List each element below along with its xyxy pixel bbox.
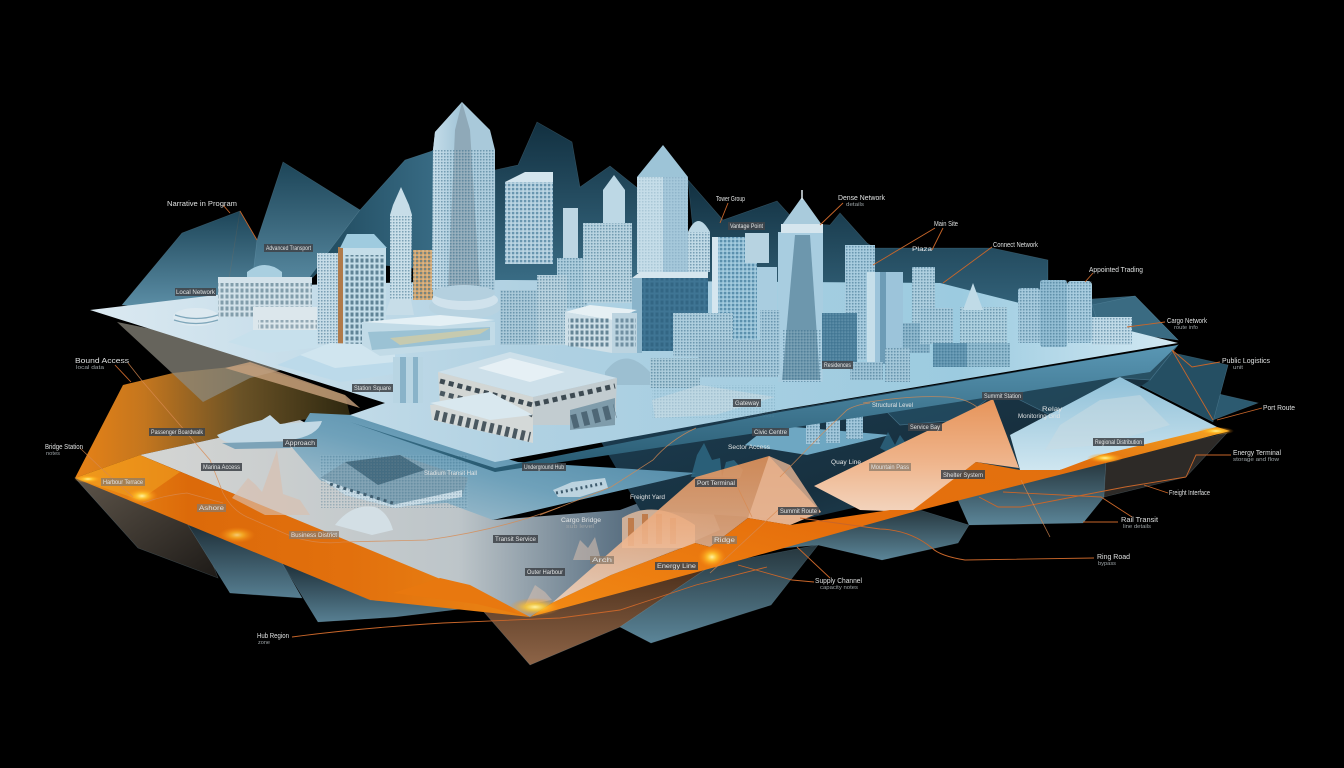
ghost skyline left (232, 450, 310, 515)
label: logistics (1222, 356, 1270, 371)
label: logistics: Public Logistics (1222, 356, 1270, 365)
facet strokes under plate (880, 345, 1178, 425)
chip: Plaza (912, 246, 932, 253)
chip: Freight Yard (630, 494, 665, 501)
mid block (253, 307, 333, 337)
chip: Underground Hub (524, 464, 564, 471)
outer labels (45, 193, 1295, 646)
label: port: Port Route (1263, 403, 1295, 412)
chip (590, 556, 614, 564)
lower peach facets and blue triangle (552, 377, 1217, 603)
label: supply: capacity notes (820, 585, 859, 591)
label: connect: Connect Network (993, 240, 1038, 249)
label: access: Bound Access (75, 356, 129, 365)
main tower (429, 102, 501, 319)
label: hub: Hub Region (257, 631, 289, 640)
pyramid tower (637, 145, 688, 273)
chip: Stadium Transit Hall (424, 470, 477, 477)
middle plate: port district (290, 407, 912, 520)
chip: Residences (824, 362, 852, 369)
underside facets: lower plate (75, 433, 1227, 665)
chip: Vantage Point (730, 223, 763, 230)
dark block (632, 272, 708, 353)
chip: Gateway (735, 400, 760, 407)
label: cargo: Cargo Network (1167, 316, 1207, 325)
chip labels (101, 222, 1144, 576)
label: north: Narrative in Program (167, 199, 237, 208)
chip: Monitoring Grid (1018, 413, 1060, 420)
chip: Relay (1042, 406, 1063, 413)
label: dense network: details (846, 202, 865, 208)
chip: Summit Station (984, 393, 1021, 400)
label: tower group: Tower Group (716, 194, 745, 203)
ghost colonnade (622, 509, 695, 548)
right facade (533, 378, 617, 425)
label: supply (815, 576, 862, 591)
left facade (438, 372, 533, 425)
chip: Transit Service (495, 536, 536, 543)
tan block (413, 250, 433, 300)
chip (197, 504, 226, 512)
label: access (75, 356, 129, 371)
chip: Summit Route (780, 508, 817, 515)
chip: Approach (285, 440, 315, 447)
chip: Ridge (714, 537, 735, 544)
chip: Cargo Bridge (561, 517, 601, 524)
label: ring road: bypass (1098, 561, 1117, 567)
label: ring road: Ring Road (1097, 552, 1130, 561)
label: station: Bridge Station (45, 442, 83, 451)
narrow cone tower (688, 221, 710, 272)
left city block (173, 102, 501, 403)
dome building (247, 265, 282, 287)
label: main site: Main Site (934, 219, 958, 228)
label: rail (1121, 515, 1159, 530)
label: hub: zone (258, 640, 270, 646)
chip: Arch (592, 557, 613, 564)
small ship (553, 478, 608, 497)
roof (438, 352, 617, 397)
orange back panel (75, 365, 350, 478)
label: cargo: route info (1174, 325, 1198, 331)
chip: Business District (291, 532, 337, 539)
chip: Station Square (354, 385, 391, 392)
central city block (500, 145, 823, 418)
squat block (565, 305, 637, 353)
chip: Sector Access (728, 444, 771, 451)
label: station (45, 442, 83, 457)
second small plate with towers (745, 407, 890, 455)
right city block (822, 245, 1132, 382)
label: ring road (1097, 552, 1130, 567)
ghost towers on dark layer right (880, 432, 912, 456)
columns (393, 357, 423, 403)
label: energy: storage and flow (1233, 457, 1279, 463)
stepped podium (277, 347, 407, 382)
ship (217, 415, 322, 449)
label: rail: Rail Transit (1121, 515, 1159, 524)
spire tower (778, 190, 823, 382)
chip: Port Terminal (697, 480, 736, 487)
label: access: local data (76, 365, 104, 371)
dome complex (605, 358, 650, 385)
narrow tower (385, 187, 414, 315)
label: energy (1233, 448, 1281, 463)
chip (561, 517, 601, 530)
label: freight: Freight Interface (1169, 488, 1210, 497)
label: hub (257, 631, 289, 646)
label: supply: Supply Channel (815, 576, 862, 585)
chip: Harbour Terrace (103, 479, 143, 486)
arena (320, 455, 468, 508)
mid glass towers (717, 237, 757, 343)
leader lines (80, 203, 1262, 637)
chip: Shelter System (943, 472, 983, 479)
chip: Passenger Boardwalk (151, 429, 204, 436)
label: rail: line details (1123, 524, 1152, 530)
ghost skyline centre (525, 537, 601, 605)
label: energy: Energy Terminal (1233, 448, 1281, 457)
back crystal facets (122, 122, 1178, 340)
portico (430, 395, 533, 443)
label: station: notes (46, 451, 61, 457)
label: logistics: unit (1233, 365, 1244, 371)
label: dense network (838, 193, 885, 208)
front civic building (430, 352, 617, 443)
disc building (173, 308, 219, 326)
glow highlights (74, 427, 1234, 616)
chip: Regional Distribution (1095, 439, 1142, 446)
chip: Service Bay (910, 424, 941, 431)
chip: sub level (566, 524, 594, 530)
peach strip under top plate (225, 362, 360, 408)
dark region under top plate (600, 345, 1178, 520)
chip: Energy Line (657, 563, 696, 570)
chip (712, 536, 737, 544)
chip (264, 244, 313, 252)
top plate (90, 280, 1178, 472)
label: trading: Appointed Trading (1089, 265, 1143, 274)
tall block (317, 253, 338, 345)
chip: Marina Access (203, 464, 241, 471)
chip: Structural Level (872, 402, 913, 409)
orange front band right (530, 427, 1230, 617)
low entrance (652, 385, 775, 418)
translucent under-plate facet (117, 322, 300, 402)
chip: Quay Line (831, 459, 861, 466)
lower pale surface (140, 420, 720, 617)
chip: Mountain Pass (871, 464, 910, 471)
dome (335, 506, 393, 535)
label: cargo (1167, 316, 1207, 331)
label: dense network: Dense Network (838, 193, 885, 202)
chip: Local Network (176, 289, 216, 296)
chip: Outer Harbour (527, 569, 564, 576)
chip: Civic Centre (754, 429, 787, 436)
orange left band (75, 455, 530, 617)
chip: Advanced Transport (266, 245, 311, 252)
right side facets behind plate (1120, 350, 1258, 422)
low blocks (673, 313, 733, 357)
chip: Ashore (199, 505, 224, 512)
ghost towers in dark layer (691, 443, 743, 478)
gallery block (362, 317, 495, 356)
